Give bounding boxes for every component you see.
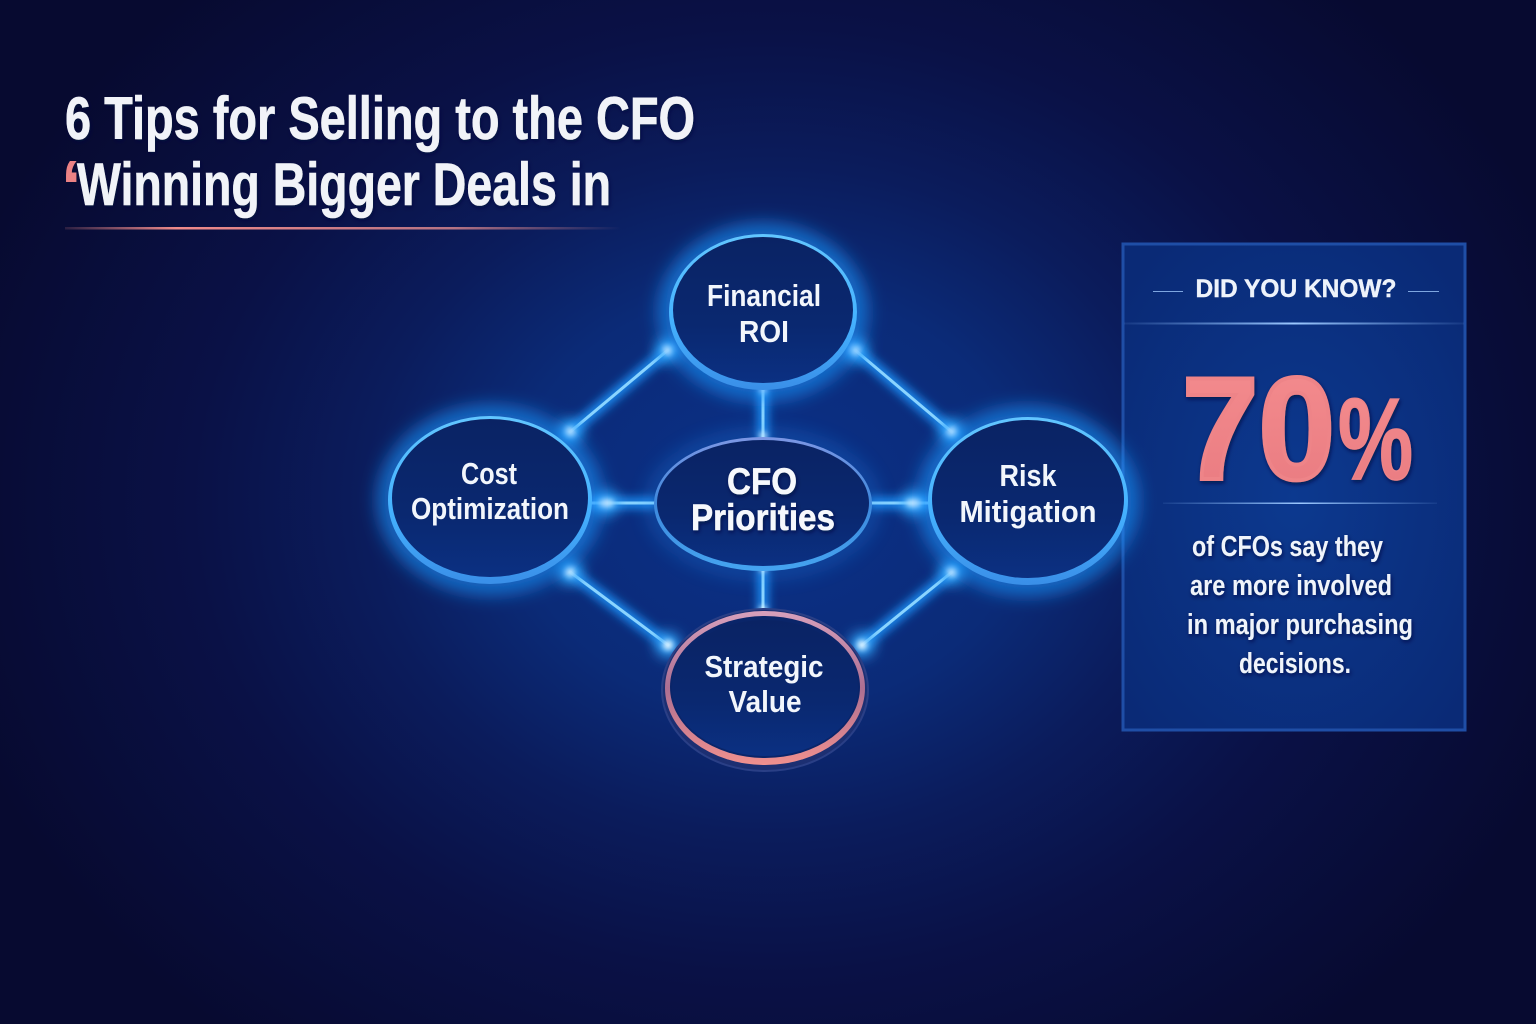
node: CFO Priorities: [654, 437, 872, 571]
title opening quote mark: ‘: [61, 145, 82, 228]
node: Strategic Value: Strategic: [704, 649, 824, 684]
node: Risk Mitigation: [928, 417, 1128, 585]
connector lines: [558, 338, 964, 657]
panel: did you know: [1123, 244, 1465, 730]
node: Cost Optimization: [388, 416, 592, 584]
statistic divider: [1163, 502, 1437, 504]
statistic: 70%: %: [1338, 374, 1413, 504]
statistic description: [1187, 531, 1413, 680]
statistic: 70%: 70: [1182, 347, 1335, 510]
node: Risk Mitigation: Risk: [1000, 458, 1057, 493]
node: CFO Priorities: Priorities: [691, 497, 835, 538]
statistic description: of CFOs say they: [1192, 531, 1383, 563]
node: Cost Optimization: Optimization: [411, 491, 569, 526]
panel header divider: [1124, 322, 1464, 324]
node: Financial ROI: ROI: [739, 314, 789, 349]
title: 6 Tips for Selling to the CFO: [65, 85, 695, 152]
statistic description: are more involved: [1190, 570, 1392, 602]
statistic description: in major purchasing: [1187, 609, 1413, 641]
title: Winning Bigger Deals in: [77, 151, 611, 218]
title: [65, 85, 695, 218]
statistic description: decisions.: [1239, 648, 1351, 680]
node: Strategic Value: [662, 609, 868, 771]
node: Strategic Value: Value: [728, 684, 802, 719]
node: Cost Optimization: Cost: [461, 456, 517, 491]
node: Risk Mitigation: Mitigation: [960, 494, 1096, 529]
node: Financial ROI: Financial: [707, 278, 821, 313]
heading side rules: [1153, 290, 1439, 292]
title underline: [65, 227, 621, 230]
node: Financial ROI: [669, 234, 857, 390]
node: CFO Priorities: CFO: [727, 461, 797, 502]
panel heading: DID YOU KNOW?: [1196, 275, 1396, 303]
